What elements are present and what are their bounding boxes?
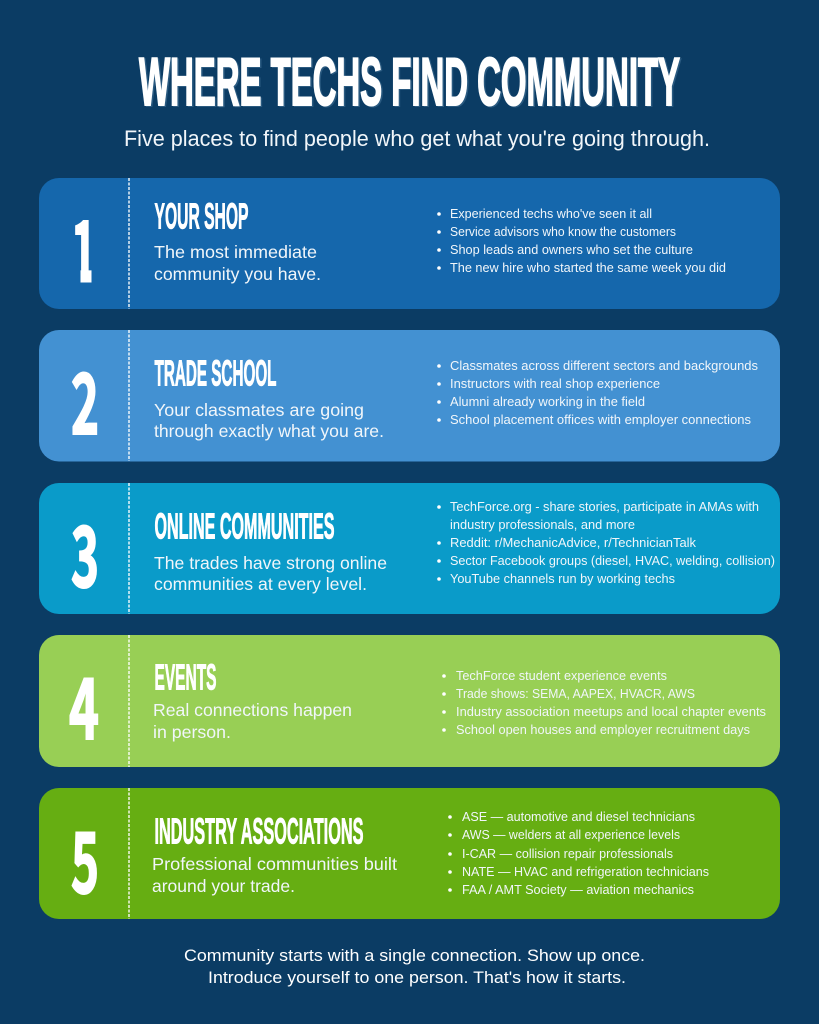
- description: trade school: through exactly what you are.: [154, 421, 384, 441]
- bullet list: industry associations: [448, 809, 709, 897]
- bullet list: your shop: Shop leads and owners who set the culture: [450, 242, 693, 257]
- bullet list: your shop: Experienced techs who've seen it all: [450, 206, 652, 221]
- description: your shop: [154, 242, 321, 284]
- footer message: [184, 946, 645, 987]
- panel: events: [39, 635, 780, 767]
- description: industry associations: Professional communities built: [152, 854, 397, 874]
- description: events: Real connections happen: [153, 700, 352, 720]
- bullet list: industry associations: ASE — automotive and diesel technicians: [462, 809, 695, 824]
- bullet list: trade school: Alumni already working in the field: [450, 394, 645, 409]
- description: events: [153, 700, 352, 742]
- bullet list: trade school: Instructors with real shop experience: [450, 376, 660, 391]
- bullet list: your shop: The new hire who started the same week you did: [450, 260, 726, 275]
- bullet list: events: Trade shows: SEMA, AAPEX, HVACR, AWS: [456, 686, 695, 701]
- bullet list: industry associations: AWS — welders at all experience levels: [462, 827, 680, 842]
- panel: events: EVENTS: [154, 656, 216, 698]
- subtitle: Five places to find people who get what you're going through.: [124, 126, 710, 151]
- bullet list: your shop: [437, 206, 726, 275]
- bullet list: events: [442, 668, 766, 737]
- bullet list: online communities: industry professionals, and more: [450, 517, 635, 532]
- bullet list: trade school: [437, 358, 758, 427]
- bullet list: events: TechForce student experience events: [456, 668, 667, 683]
- number 4: 4: [69, 643, 99, 764]
- description: online communities: communities at every level.: [154, 574, 367, 594]
- description: industry associations: [152, 854, 397, 896]
- bullet list: online communities: Sector Facebook groups (diesel, HVAC, welding, collision): [450, 553, 775, 568]
- bullet list: events: Industry association meetups and local chapter events: [456, 704, 766, 719]
- panel: online communities: [39, 483, 780, 614]
- description: events: in person.: [153, 722, 231, 742]
- bullet list: your shop: Service advisors who know the customers: [450, 224, 676, 239]
- panel: online communities: ONLINE COMMUNITIES: [154, 506, 334, 546]
- bullet list: trade school: Classmates across different sectors and backgrounds: [450, 358, 758, 373]
- bullet list: events: School open houses and employer recruitment days: [456, 722, 750, 737]
- description: trade school: [154, 400, 384, 441]
- panel: your shop: [39, 178, 780, 309]
- panel: industry associations: [39, 788, 780, 919]
- bullet list: online communities: [437, 499, 775, 586]
- bullet list: trade school: School placement offices with employer connections: [450, 412, 751, 427]
- bullet list: online communities: YouTube channels run by working techs: [450, 571, 675, 586]
- description: your shop: community you have.: [154, 264, 321, 284]
- bullet list: industry associations: I-CAR — collision repair professionals: [462, 846, 673, 861]
- number 3: 3: [71, 491, 99, 612]
- number 5: 5: [71, 797, 99, 918]
- description: online communities: [154, 553, 387, 594]
- footer message: Introduce yourself to one person. That's how it starts.: [208, 968, 626, 987]
- number 2: 2: [71, 338, 99, 459]
- description: trade school: Your classmates are going: [154, 400, 364, 420]
- description: your shop: The most immediate: [154, 242, 317, 262]
- panel: your shop: YOUR SHOP: [154, 196, 248, 236]
- number 1: 1: [71, 186, 97, 306]
- bullet list: online communities: TechForce.org - share stories, participate in AMAs with: [450, 499, 759, 514]
- footer message: Community starts with a single connection. Show up once.: [184, 946, 645, 965]
- panel: trade school: [39, 330, 780, 462]
- bullet list: industry associations: FAA / AMT Society — aviation mechanics: [462, 882, 694, 897]
- bullet list: online communities: Reddit: r/MechanicAdvice, r/TechnicianTalk: [450, 535, 696, 550]
- panel: industry associations: INDUSTRY ASSOCIATIONS: [154, 810, 364, 852]
- panel: trade school: TRADE SCHOOL: [154, 352, 276, 394]
- description: online communities: The trades have strong online: [154, 553, 387, 573]
- bullet list: industry associations: NATE — HVAC and refrigeration technicians: [462, 864, 709, 879]
- description: industry associations: around your trade.: [152, 876, 295, 896]
